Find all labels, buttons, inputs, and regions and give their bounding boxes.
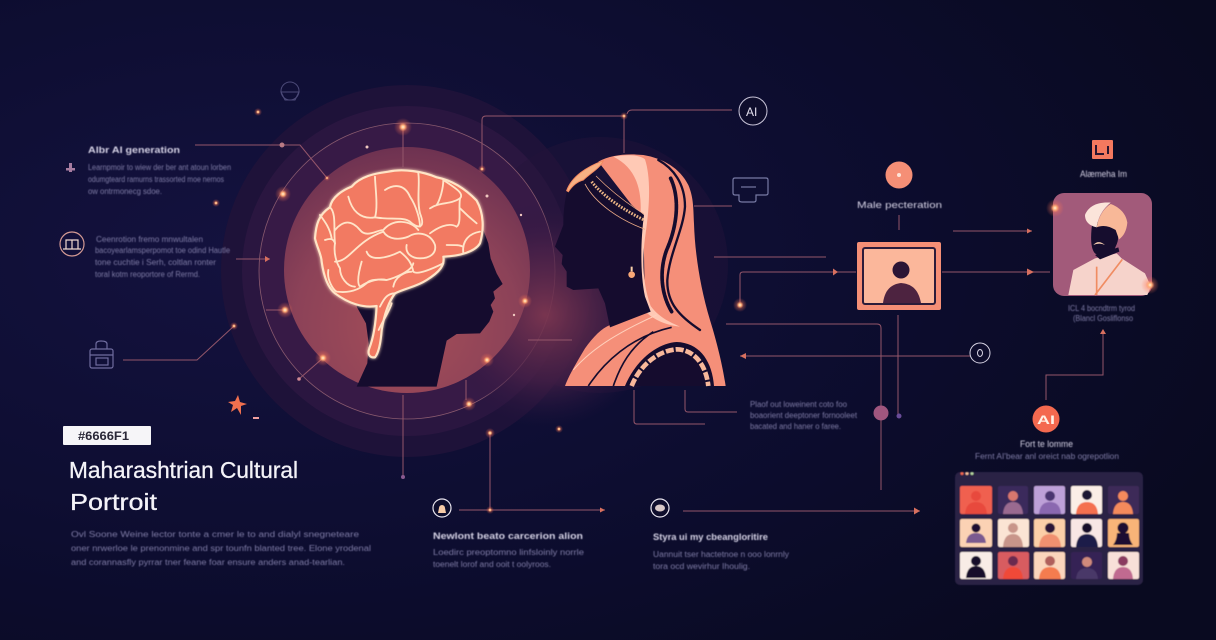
intro paragraph: oner nrwerloe le prenonmine and spr tounfn blanted tree. Elone yrodenal: [71, 544, 371, 553]
panel: cultural text: Ceenrotion fremo mnwultalen: [96, 235, 203, 244]
panel: bottom step 1: Newlont beato carcerion alion: [433, 531, 583, 542]
panel: bottom step 1: [433, 499, 585, 569]
connector lines: [123, 110, 1103, 511]
woman in sari silhouette: [555, 154, 726, 386]
panel: AI generation: Albr AI generation: [88, 145, 180, 156]
panel: cultural text: bacoyearlamsperpomot toe odind Hautle: [95, 246, 231, 255]
star marker: [228, 395, 259, 419]
head band: [585, 176, 645, 229]
title: Portroit: [70, 489, 158, 515]
intro paragraph: and corannasfly pyrrar tner feane foar ensure anders anad-tearlian.: [71, 558, 345, 567]
panel: cultural text: [95, 235, 231, 279]
icon: bag: [90, 341, 113, 368]
panel: Alaemeha portrait: [1053, 140, 1152, 323]
veil border: [658, 160, 700, 330]
icon: AI circle: [739, 97, 767, 125]
head silhouette: [357, 230, 503, 387]
panel: right note: boaorient deeptoner fornooleet: [750, 411, 858, 420]
panel: right note: [750, 400, 858, 431]
panel: AI generation: Learnpmoir to wiew der ber ant atoun lorben: [88, 163, 231, 172]
panel: Alaemeha portrait: (Blancl Gosliflonso: [1073, 314, 1133, 323]
panel: Alaemeha portrait: ICL 4 bocndtrm tyrod: [1068, 304, 1135, 313]
sari: [565, 154, 726, 386]
flowers: [567, 161, 603, 192]
intro paragraph: [71, 530, 371, 567]
chest drape: [573, 315, 714, 386]
panel: AI gallery: Fort te lomme: [1020, 439, 1073, 450]
panel: Alaemeha portrait: Alæmeha Im: [1080, 169, 1127, 180]
concentric disc behind head: [221, 85, 728, 457]
panel: cultural text: tone cuchtie i Serh, coltlan ronter: [95, 258, 216, 267]
panel: cultural text: toral kotm reoportore of Rermd.: [95, 270, 200, 279]
earring: [628, 267, 635, 278]
face and neck: [555, 173, 651, 327]
panel: bottom step 2: Styra ui my cbeangloritire: [653, 532, 768, 543]
panel: bottom step 2: tora ocd wevirhur Ihoulig.: [653, 562, 750, 571]
title: Maharashtrian Cultural: [69, 457, 298, 483]
icon: helmet: [281, 82, 299, 100]
panel: male generation: Male pecteration: [857, 200, 942, 211]
panel: bottom step 1: Loedirc preoptomno linfsloinly norrle: [433, 548, 585, 557]
icon: book circle: [60, 232, 84, 256]
title: [69, 457, 298, 515]
icon: monitor speech bubble: [733, 178, 768, 202]
panel: AI gallery: Fernt AI'bear anl oreict nab ogrepotlion: [975, 452, 1119, 461]
glowing nodes: [212, 108, 1159, 514]
icon: plus marker: [66, 163, 75, 172]
node: purple: [874, 406, 888, 420]
head silhouette with brain: [315, 170, 503, 387]
node: small: [896, 414, 902, 418]
arrow heads: [265, 228, 1106, 514]
panel: AI generation: ow ontrmonecg sdoe.: [88, 187, 162, 196]
panel: bottom step 1: toenelt lorof and ooit t oolyroos.: [433, 560, 551, 569]
icon: AI circle: AI: [746, 105, 757, 119]
panel: bottom step 2: [651, 499, 789, 571]
title badge: [63, 426, 151, 445]
panel: AI generation: odumgteard ramurns trassorted moe nernos: [88, 175, 224, 184]
sari highlight: [613, 155, 680, 327]
framed portrait: [857, 242, 941, 310]
gallery window: [955, 472, 1143, 585]
panel: AI gallery: AI: [1037, 413, 1055, 427]
panel: AI generation: [88, 145, 231, 196]
intro paragraph: Ovl Soone Weine lector tonte a cmer le to and dialyl snegneteare: [71, 530, 360, 539]
brain: [315, 170, 483, 357]
panel: right note: bacated and haner o faree.: [750, 422, 841, 431]
panel: AI gallery: [955, 406, 1143, 585]
title badge: #6666F1: [78, 429, 129, 443]
panel: bottom step 2: Uannuit tser hactetnoe n ooo lonrnly: [653, 550, 789, 559]
panel: male generation: [857, 162, 942, 211]
icon: small ring: [970, 343, 990, 363]
panel: right note: Plaof out loweinent coto foo: [750, 400, 848, 409]
